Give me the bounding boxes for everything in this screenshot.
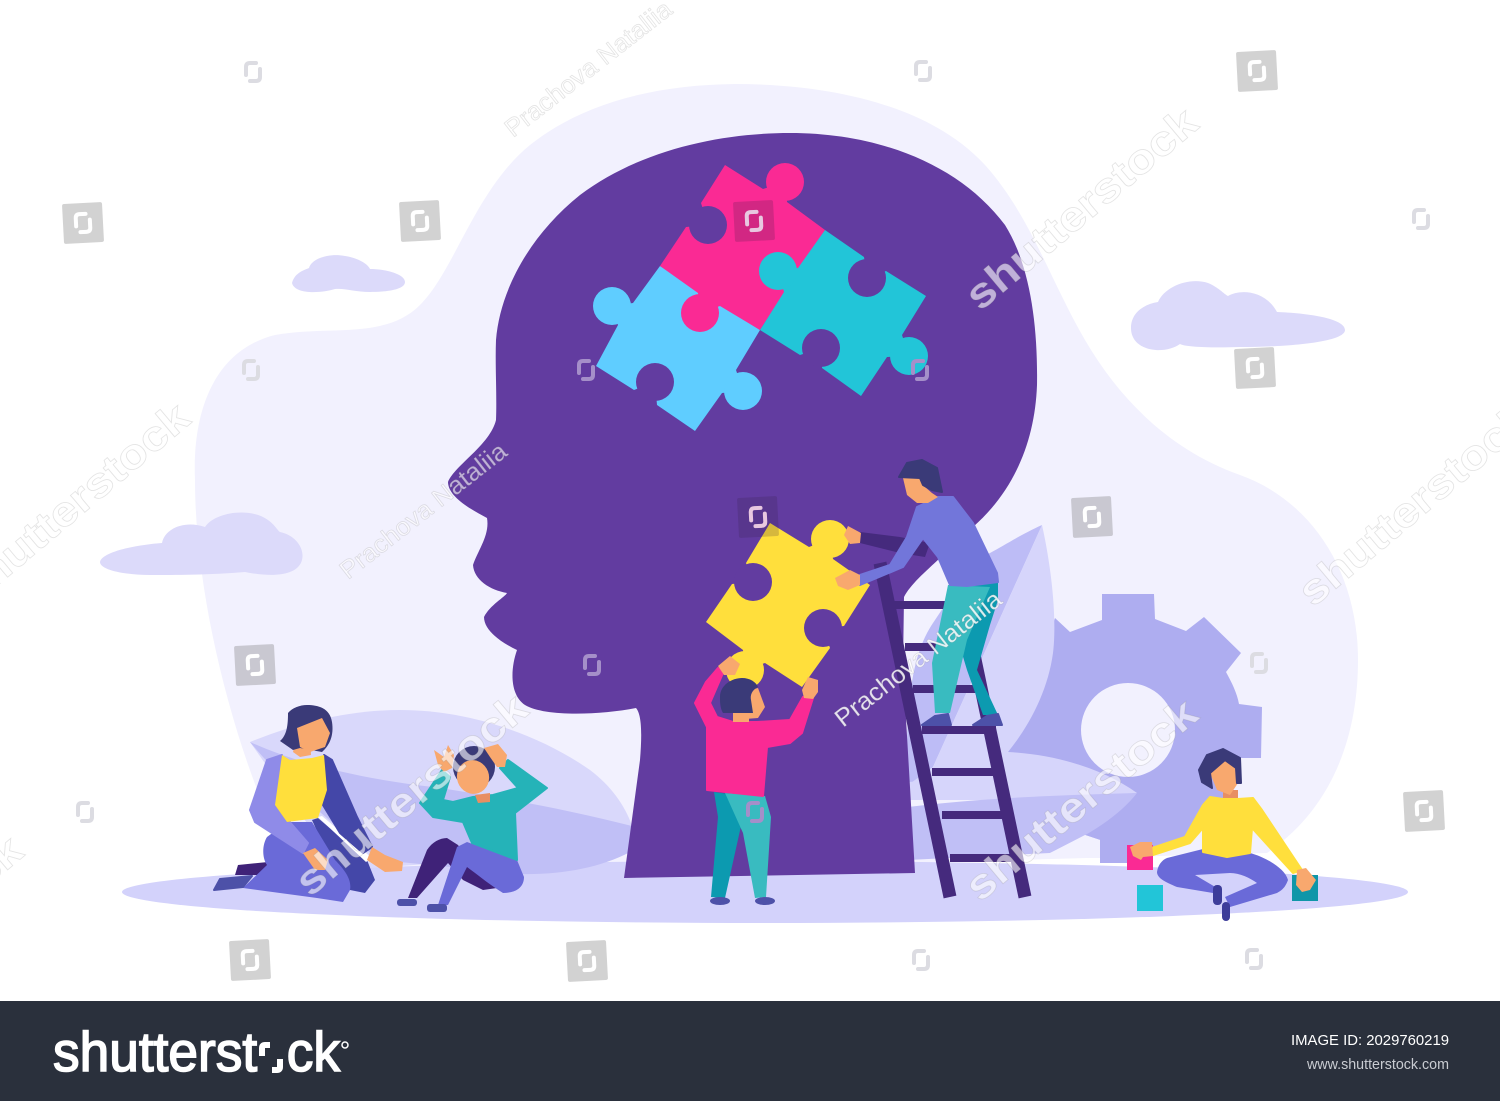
person: sitting woman — [214, 705, 403, 902]
watermark text: shutterstock — [286, 683, 537, 905]
site: www.shutterstock.com — [1306, 1057, 1449, 1073]
person: worried man — [397, 744, 547, 912]
person: climbing man — [835, 460, 1002, 725]
person: man with blocks — [1127, 749, 1318, 921]
image id: IMAGE ID: 2029760219 — [1291, 1032, 1449, 1049]
background blob — [195, 84, 1358, 880]
person: lifting woman in pink — [695, 656, 818, 905]
ground ellipse — [122, 861, 1408, 923]
jigsaw puzzle in head — [593, 163, 928, 431]
registered mark — [342, 1042, 348, 1048]
logo text: shutterstock — [53, 1020, 341, 1083]
clouds — [100, 255, 1345, 575]
gear — [1008, 594, 1262, 863]
watermark text: shutterstock — [956, 688, 1207, 910]
watermark text: shutterstock — [956, 97, 1207, 319]
watermark text: Prachova Nataliia — [829, 585, 1008, 733]
puzzle: yellow held — [706, 520, 870, 689]
right hills — [908, 752, 1137, 860]
watermark text: Prachova Nataliia — [334, 437, 513, 585]
leaf behind ladder — [907, 525, 1054, 790]
blocks — [1127, 845, 1153, 870]
puzzle: magenta top — [660, 163, 825, 332]
watermark text: Prachova Nataliia — [499, 0, 678, 143]
ladder — [880, 563, 1025, 897]
watermark: small logo marks — [62, 50, 1445, 982]
head silhouette — [448, 133, 1037, 878]
cloud: mid left — [100, 513, 303, 575]
cloud: top right — [1131, 281, 1345, 350]
puzzle: cyan left — [593, 266, 762, 431]
left hills — [250, 710, 632, 874]
cloud: top left — [292, 255, 405, 292]
puzzle: teal right — [759, 230, 928, 396]
logo mark — [262, 1045, 280, 1070]
footer bar — [0, 1001, 1500, 1101]
